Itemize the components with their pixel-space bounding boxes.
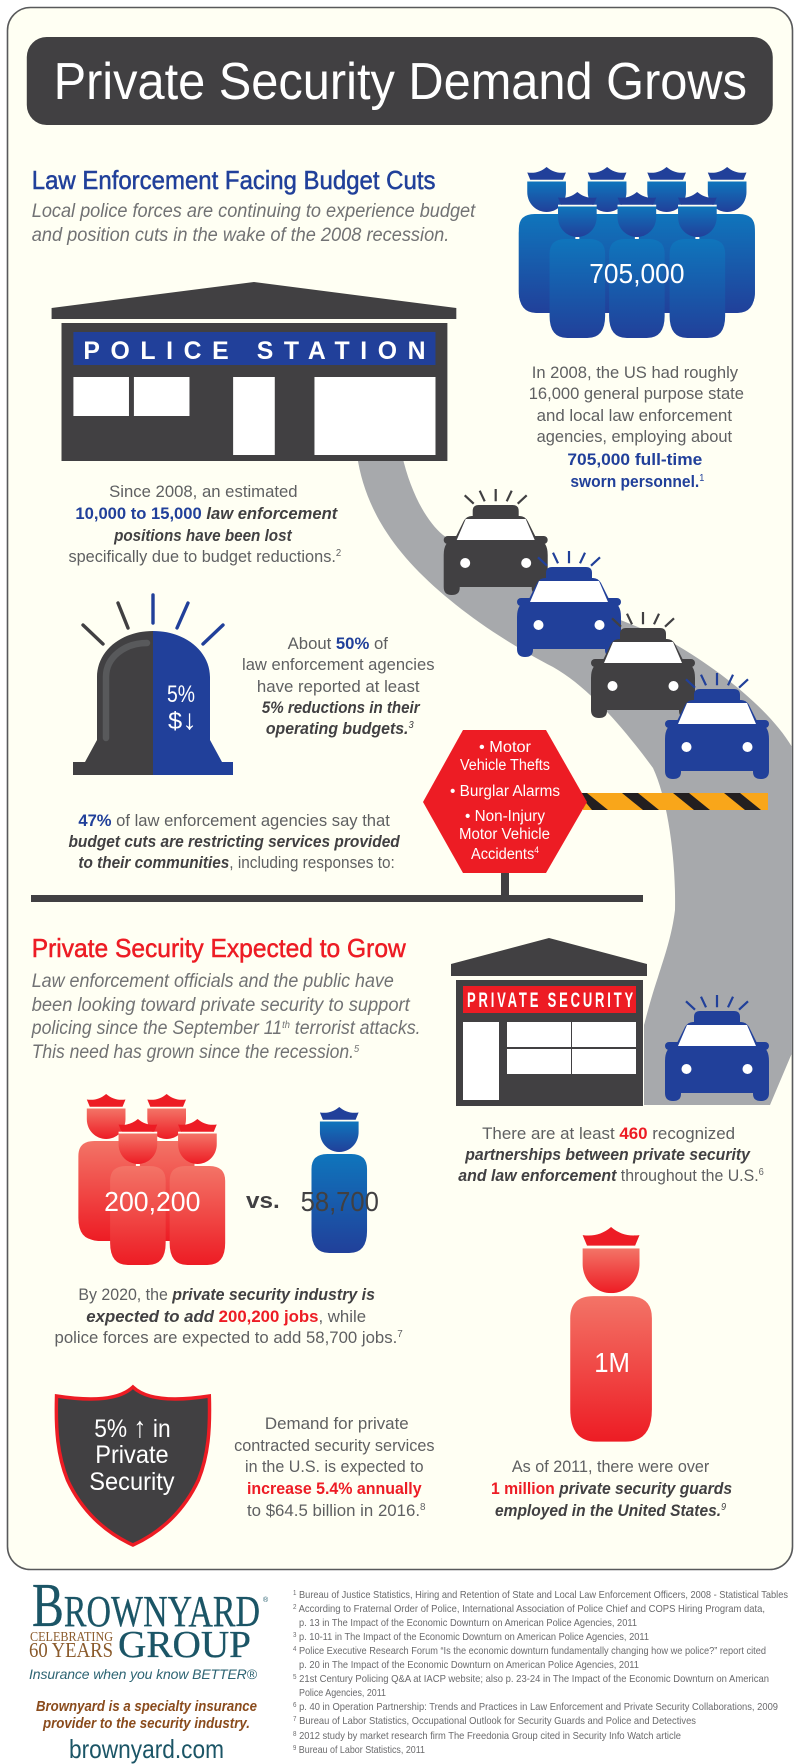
intro text: private security: terrorist attacks. bbox=[290, 1018, 421, 1039]
title: Private Security Demand Grows bbox=[54, 52, 747, 110]
label: 58,700: 58,700 bbox=[301, 1186, 379, 1217]
text: 50% of agencies: law enforcement agencies bbox=[242, 655, 434, 674]
intro text: private security: been looking toward private security to support bbox=[32, 995, 410, 1016]
text: contracted services demand: increase 5.4% annually bbox=[247, 1479, 422, 1498]
footnotes: 1 bbox=[293, 1590, 297, 1597]
icon: shield 5% up bbox=[56, 1387, 210, 1545]
icon: large red guard 1M bbox=[570, 1227, 652, 1442]
text: contracted services demand: 8 bbox=[420, 1502, 426, 1513]
icon: shield 5% up: 5% ↑ in bbox=[94, 1412, 171, 1444]
text: 47% of agencies bbox=[68, 811, 400, 872]
text: 2008 agencies: 16,000 general purpose state bbox=[529, 384, 744, 403]
footnotes: 6 bbox=[293, 1702, 297, 1709]
text: positions lost bbox=[68, 482, 342, 566]
text: 50% of agencies: have reported at least bbox=[257, 677, 420, 696]
private security building bbox=[451, 938, 647, 1106]
text: jobs forecast: 7 bbox=[397, 1329, 403, 1340]
title bar bbox=[27, 37, 773, 125]
footnotes: Police Agencies, 2011 bbox=[299, 1687, 386, 1699]
stop sign: services bbox=[423, 730, 587, 873]
text: 2008 agencies: and local law enforcement bbox=[537, 406, 732, 425]
text: jobs forecast: By 2020, the private security industry is bbox=[78, 1285, 375, 1304]
intro text: private security: Law enforcement officials and the public have bbox=[32, 971, 394, 992]
text: 2008 agencies: In 2008, the US had roughly bbox=[532, 363, 739, 382]
text: positions lost: 10,000 to 15,000 law enforcement bbox=[75, 504, 339, 523]
text: contracted services demand bbox=[234, 1414, 434, 1520]
label: 1M: 1M bbox=[594, 1347, 630, 1378]
text: 460 partnerships: and law enforcement throughout the U.S. bbox=[458, 1166, 767, 1185]
text: 50% of agencies: 5% reductions in their bbox=[262, 698, 421, 717]
text: Brownyard description: provider to the security industry. bbox=[42, 1715, 250, 1732]
cars on road bbox=[444, 489, 769, 779]
footnotes: 9 bbox=[293, 1745, 296, 1752]
text: 460 partnerships bbox=[458, 1124, 764, 1185]
stop sign: services: 4 bbox=[534, 845, 539, 855]
text: positions lost: positions have been lost bbox=[113, 526, 293, 545]
text: jobs forecast: expected to add 200,200 jobs, while bbox=[86, 1307, 366, 1326]
stop sign: services: • Non-Injury bbox=[465, 808, 545, 825]
intro text: budget cuts: and position cuts in the wake of the 2008 recession. bbox=[32, 225, 449, 246]
text: 2008 agencies: 1 bbox=[699, 473, 705, 484]
text: 50% of agencies: About 50% of bbox=[288, 634, 388, 653]
intro text: budget cuts: Local police forces are continuing to experience budget bbox=[32, 201, 476, 222]
footnotes: p. 13 in The Impact of the Economic Downturn on American Police Agencies, 2011 bbox=[299, 1617, 637, 1629]
text: 460 partnerships: There are at least 460 recognized bbox=[482, 1124, 735, 1143]
text: 50% of agencies: operating budgets. bbox=[266, 719, 418, 738]
text: 47% of agencies: 47% of law enforcement agencies say that bbox=[78, 811, 390, 830]
footnotes: 2 bbox=[293, 1604, 297, 1611]
label: 705,000: 705,000 bbox=[589, 258, 684, 289]
heading: private security: Private Security Expected to Grow bbox=[32, 935, 406, 963]
text: positions lost: specifically due to budget reductions. bbox=[68, 547, 345, 566]
footnotes: 7 bbox=[293, 1716, 297, 1723]
text: 460 partnerships: 6 bbox=[759, 1167, 764, 1178]
police station building bbox=[52, 282, 456, 461]
stop sign: services: Motor Vehicle bbox=[459, 826, 550, 843]
text: positions lost: 2 bbox=[336, 548, 342, 559]
text: contracted services demand: Demand for private bbox=[265, 1414, 409, 1433]
icon: siren 5% budget reduction: 5% bbox=[167, 681, 195, 708]
text: 1 million guards: employed in the United States. bbox=[495, 1501, 740, 1520]
icon: siren 5% budget reduction: $↓ bbox=[168, 704, 197, 735]
text: jobs forecast: police forces are expected to add 58,700 jobs. bbox=[55, 1328, 399, 1347]
road bbox=[357, 455, 792, 1105]
intro text: private security bbox=[31, 971, 421, 1063]
text: jobs forecast bbox=[55, 1285, 403, 1347]
icon: shield 5% up: Private bbox=[95, 1441, 169, 1469]
text: 2008 agencies: sworn personnel. bbox=[570, 472, 710, 491]
footnotes: p. 20 in The Impact of the Economic Downturn on American Police Agencies, 2011 bbox=[299, 1659, 639, 1671]
sign: private security: PRIVATE SECURITY bbox=[467, 988, 633, 1012]
text: 50% of agencies: 3 bbox=[408, 720, 414, 731]
logo: Brownyard Group bbox=[29, 1572, 269, 1682]
logo: Brownyard Group: 60 YEARS bbox=[29, 1638, 113, 1662]
text: 50% of agencies bbox=[242, 634, 434, 738]
intro text: private security: policing since the September 11 bbox=[32, 1018, 298, 1039]
car 3 bbox=[591, 612, 695, 718]
footnotes: Bureau of Labor Statistics, 2011 bbox=[296, 1744, 425, 1756]
stop sign: services: Vehicle Thefts bbox=[460, 757, 550, 774]
text: 2008 agencies: 705,000 full-time bbox=[567, 450, 702, 469]
logo: Brownyard Group: BROWNYARD bbox=[32, 1572, 260, 1640]
text: 47% of agencies: budget cuts are restricting services provided bbox=[68, 832, 400, 851]
car 4 bbox=[665, 673, 769, 779]
footnotes: 5 bbox=[293, 1674, 297, 1681]
footnotes: 8 bbox=[293, 1731, 297, 1738]
car 5 by private security building bbox=[665, 995, 769, 1101]
car 1 bbox=[444, 489, 548, 595]
icon: red group 200,200 bbox=[78, 1094, 225, 1265]
logo: Brownyard Group: ® bbox=[263, 1596, 269, 1604]
stop sign: services: • Burglar Alarms bbox=[450, 783, 560, 800]
text: 1 million guards: 1 million private security guards bbox=[491, 1479, 732, 1498]
text: contracted services demand: to $64.5 billion in 2016. bbox=[247, 1501, 420, 1520]
intro text: private security: 5 bbox=[354, 1044, 360, 1055]
text: contracted services demand: contracted security services bbox=[234, 1436, 434, 1455]
intro text: private security: th bbox=[282, 1020, 290, 1031]
label: 200,200: 200,200 bbox=[104, 1186, 200, 1217]
text: 1 million guards bbox=[491, 1457, 732, 1520]
intro text: private security: This need has grown since the recession. bbox=[32, 1042, 378, 1063]
footnotes: 2012 study by market research firm The Freedonia Group cited in Security Info Watch article bbox=[296, 1730, 681, 1742]
text: Brownyard description bbox=[36, 1698, 257, 1732]
icon: blue officer 58,700 bbox=[301, 1107, 379, 1253]
stop sign: services: • Motor bbox=[479, 739, 531, 756]
logo: Brownyard Group: CELEBRATING bbox=[30, 1630, 113, 1645]
tagline: Insurance when you know BETTER® bbox=[29, 1666, 258, 1682]
icon: shield 5% up: Security bbox=[89, 1468, 175, 1496]
icon: siren 5% budget reduction bbox=[73, 595, 233, 775]
text: Brownyard description: Brownyard is a specialty insurance bbox=[36, 1698, 257, 1715]
text: 2008 agencies bbox=[529, 363, 744, 491]
logo: Brownyard Group: GROUP bbox=[118, 1624, 251, 1666]
stop sign: services: Accidents bbox=[471, 846, 538, 863]
icon: group of 705,000 police bbox=[519, 167, 755, 338]
footnotes: 4 bbox=[293, 1646, 297, 1653]
text: contracted services demand: in the U.S. is expected to bbox=[245, 1457, 424, 1476]
text: 1 million guards: 9 bbox=[721, 1502, 727, 1513]
text: 47% of agencies: to their communities, including responses to: bbox=[78, 853, 395, 872]
footnotes: 3 bbox=[293, 1632, 297, 1639]
barrier arm bbox=[578, 793, 768, 810]
footnotes: Bureau of Labor Statistics, Occupational Outlook for Security Guards and Police and Detectives bbox=[296, 1715, 696, 1727]
sign: police station: POLICE STATION bbox=[83, 337, 426, 365]
ground line and sign post bbox=[31, 873, 643, 902]
car 2 bbox=[517, 551, 621, 657]
footnotes: p. 10-11 in The Impact of the Economic Downturn on American Police Agencies, 2011 bbox=[296, 1631, 649, 1643]
text: 2008 agencies: agencies, employing about bbox=[537, 427, 732, 446]
footnotes bbox=[293, 1589, 788, 1756]
label: versus: vs. bbox=[246, 1188, 280, 1213]
text: 1 million guards: As of 2011, there were over bbox=[512, 1457, 710, 1476]
heading: law enforcement: Law Enforcement Facing Budget Cuts bbox=[32, 167, 435, 195]
text: 460 partnerships: partnerships between private security bbox=[464, 1145, 751, 1164]
intro text: budget cuts bbox=[32, 201, 476, 246]
text: positions lost: Since 2008, an estimated bbox=[109, 482, 298, 501]
website: brownyard.com bbox=[69, 1734, 224, 1764]
